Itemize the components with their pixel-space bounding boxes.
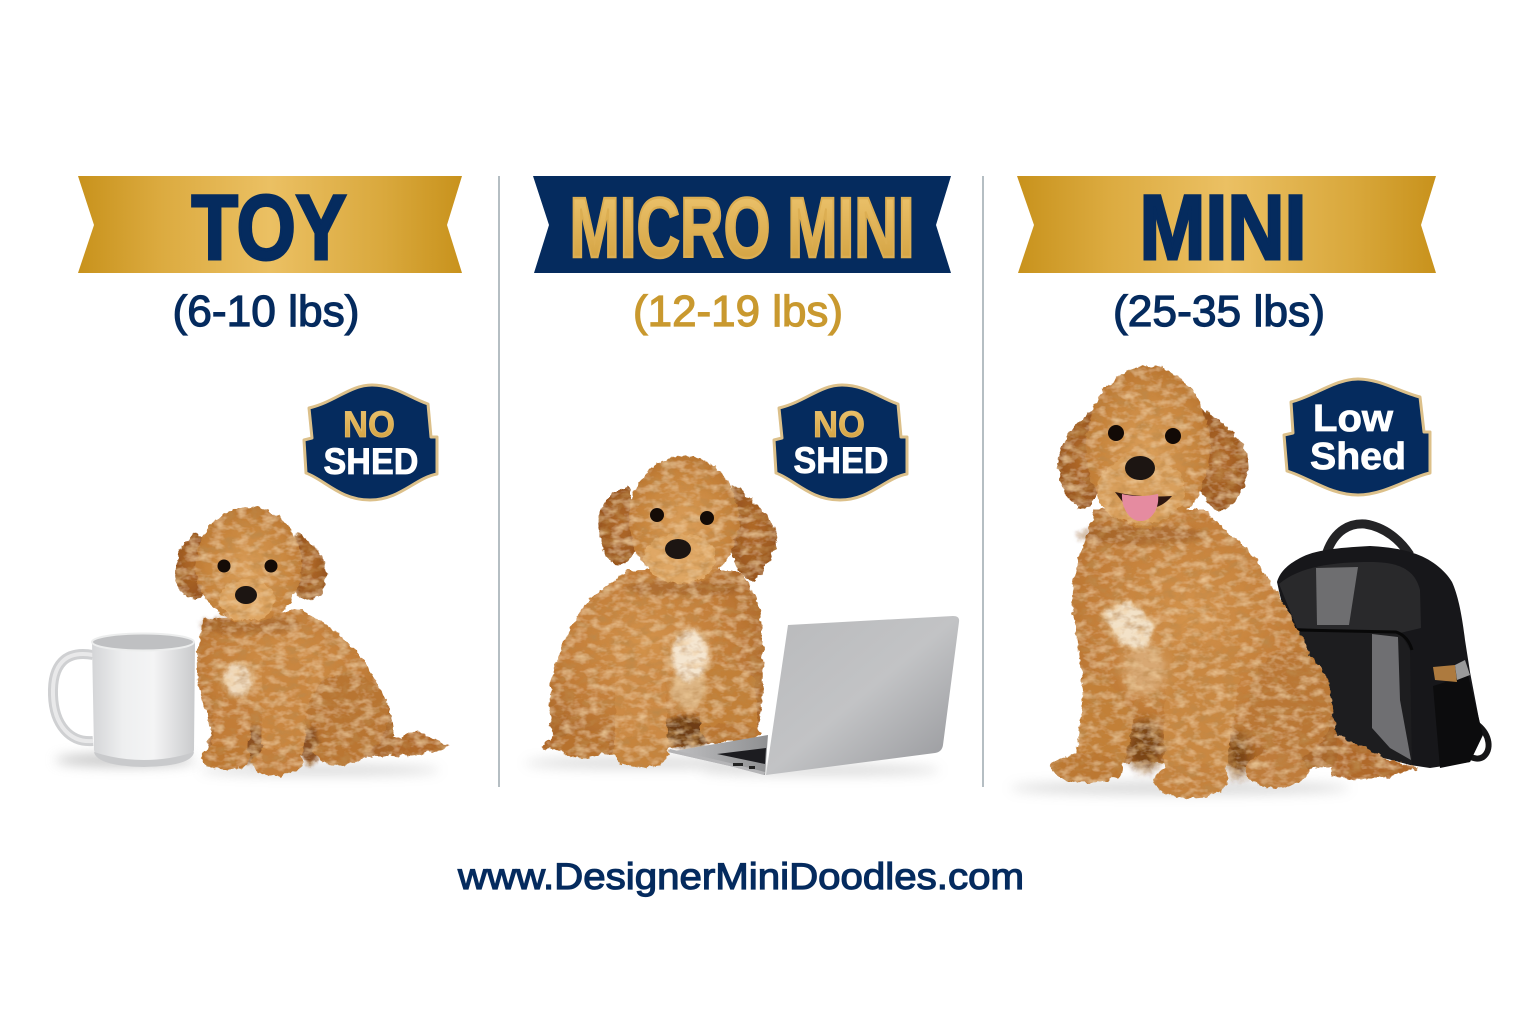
puppy: toy bbox=[176, 507, 450, 776]
weight: micro mini: (12-19 lbs) bbox=[633, 287, 843, 336]
badge: low shed: Shed bbox=[1310, 436, 1406, 478]
badge: no shed bbox=[304, 385, 437, 500]
icon: backpack bbox=[1277, 524, 1489, 768]
icon: mug bbox=[53, 634, 195, 767]
panel: mini bbox=[1010, 176, 1489, 798]
weight: toy: (6-10 lbs) bbox=[172, 287, 360, 336]
badge: no shed: NO bbox=[813, 404, 865, 445]
badge: low shed bbox=[1284, 379, 1430, 495]
banner: mini bbox=[1017, 176, 1436, 279]
panel: toy bbox=[53, 176, 462, 776]
puppy: micro mini bbox=[525, 456, 777, 768]
badge: no shed: SHED bbox=[324, 441, 418, 482]
puppy: mini bbox=[1010, 366, 1417, 798]
icon: laptop bbox=[668, 616, 959, 775]
footer url: www.DesignerMiniDoodles.com bbox=[457, 856, 1024, 897]
banner: toy bbox=[78, 176, 462, 279]
panel: micro mini bbox=[525, 176, 959, 775]
badge: no shed bbox=[774, 385, 907, 500]
badge: no shed: NO bbox=[343, 404, 395, 445]
badge: low shed: Low bbox=[1313, 398, 1393, 440]
banner: mini: MINI bbox=[1140, 177, 1306, 279]
badge: no shed: SHED bbox=[794, 440, 888, 481]
weight: mini: (25-35 lbs) bbox=[1113, 287, 1325, 336]
banner: toy: TOY bbox=[192, 177, 346, 279]
banner: micro mini: MICRO MINI bbox=[570, 181, 914, 276]
